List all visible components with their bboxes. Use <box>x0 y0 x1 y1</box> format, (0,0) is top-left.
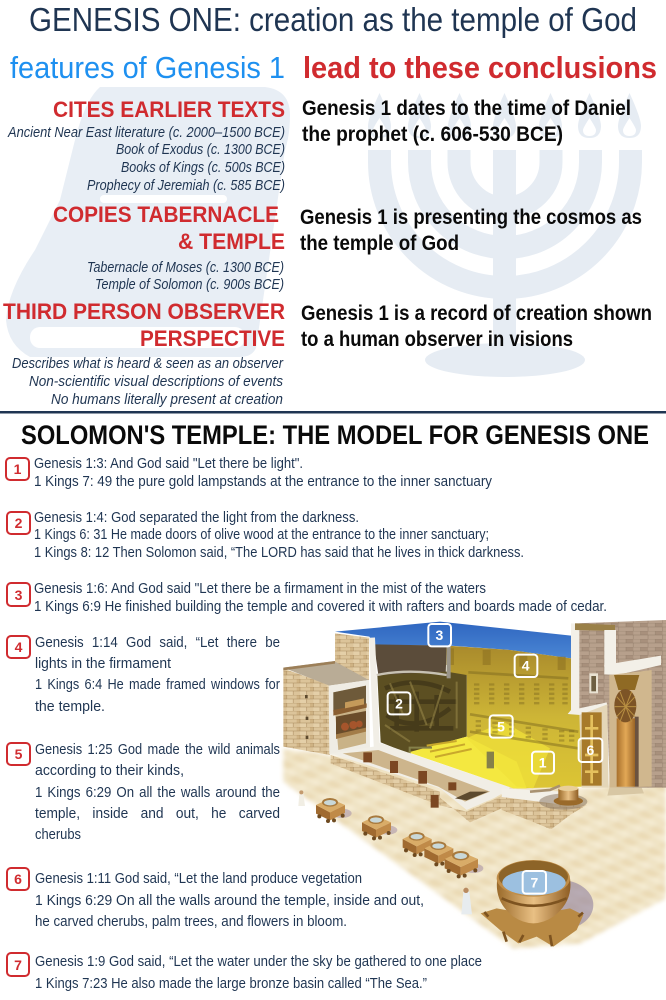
item 3: Genesis 1:6: And God said "Let there be a firmament in the mist of the waters <box>34 581 486 597</box>
item 4: Genesis 1:14 God said, “Let there be <box>35 635 280 651</box>
item 3: 3 <box>15 587 23 603</box>
feature: copies tabernacle and temple: Tabernacle of Moses (c. 1300 BCE) <box>87 259 284 276</box>
map marker 5: 5 <box>497 719 505 735</box>
item 1 <box>6 456 493 490</box>
feature: cites earlier texts: Ancient Near East literature (c. 2000–1500 BCE) <box>7 124 285 141</box>
item 6: 1 Kings 6:29 On all the walls around the temple, inside and out, <box>35 893 424 909</box>
map marker 5 <box>490 715 513 738</box>
right porch building <box>568 620 666 796</box>
conclusion: date of Genesis 1: Genesis 1 dates to the time of Daniel <box>302 97 631 120</box>
wheeled stands <box>316 798 483 878</box>
item 4: lights in the firmament <box>35 656 171 672</box>
white cut section edge <box>372 638 509 790</box>
item 7 <box>7 953 482 992</box>
blue roof <box>335 622 571 658</box>
illustration: cutaway of Solomon's temple <box>283 620 666 948</box>
item 4: 1 Kings 6:4 He made framed windows for <box>35 677 280 693</box>
feature: cites earlier texts: Book of Exodus (c. 1300 BCE) <box>116 141 285 158</box>
map marker 6 <box>579 738 602 762</box>
conclusion: cosmos as temple <box>300 206 642 255</box>
item 7: 1 Kings 7:23 He also made the large bronze basin called “The Sea.” <box>35 976 427 992</box>
item 6 <box>7 868 424 930</box>
feature: copies tabernacle and temple: COPIES TABERNACLE <box>53 202 279 227</box>
low cut stone wall <box>331 746 587 829</box>
feature: third person observer perspective: THIRD PERSON OBSERVER <box>3 299 285 324</box>
item 2 <box>7 510 524 561</box>
item 1: 1 <box>14 461 22 477</box>
watermark: left stone shape <box>6 87 290 357</box>
item 3: 1 Kings 6:9 He finished building the temple and covered it with rafters and boards made of cedar. <box>34 599 607 615</box>
map marker 4: 4 <box>522 658 530 674</box>
conclusion: record of visions: to a human observer in visions <box>301 328 573 351</box>
conclusion: cosmos as temple: the temple of God <box>300 232 459 255</box>
feature: third person observer perspective: Describes what is heard & seen as an observer <box>12 355 284 372</box>
left side chambers wall <box>283 633 380 755</box>
map marker 2 <box>388 692 410 714</box>
item 6: he carved cherubs, palm trees, and flowers in bloom. <box>35 914 347 930</box>
feature: copies tabernacle and temple: & TEMPLE <box>178 229 285 254</box>
item 5: 5 <box>15 746 23 762</box>
item 4 <box>7 635 280 715</box>
feature: cites earlier texts: Prophecy of Jeremiah (c. 585 BCE) <box>87 177 285 194</box>
item 6: 6 <box>14 871 22 887</box>
feature: third person observer perspective: Non-scientific visual descriptions of events <box>29 373 283 390</box>
feature: copies tabernacle and temple: Temple of Solomon (c. 900s BCE) <box>95 276 284 293</box>
item 5 <box>7 742 280 843</box>
human figures <box>298 790 472 914</box>
feature: third person observer perspective: PERSPECTIVE <box>140 326 285 351</box>
conclusion: record of visions <box>301 302 652 351</box>
lampstand base near entrance <box>530 786 587 810</box>
map marker 3 <box>428 624 451 646</box>
map marker 1: 1 <box>539 755 547 771</box>
item 1: Genesis 1:3: And God said "Let there be light". <box>34 456 303 472</box>
item 5: temple, inside and out, he carved <box>35 806 280 822</box>
conclusion: date of Genesis 1: the prophet (c. 606-530 BCE) <box>302 123 563 146</box>
map marker 2: 2 <box>395 695 403 711</box>
feature: copies tabernacle and temple <box>53 202 285 293</box>
feature: third person observer perspective: No humans literally present at creation <box>51 391 283 408</box>
map marker 6: 6 <box>586 742 594 758</box>
item 4: 4 <box>15 639 23 655</box>
conclusion: date of Genesis 1 <box>302 97 631 146</box>
feature: cites earlier texts: CITES EARLIER TEXTS <box>53 97 285 122</box>
item 5: cherubs <box>35 827 81 843</box>
item 3 <box>7 581 607 615</box>
map marker 7 <box>523 871 546 894</box>
item 4: the temple. <box>35 699 105 715</box>
item 1: 1 Kings 7: 49 the pure gold lampstands at the entrance to the inner sanctuary <box>34 474 493 490</box>
feature: cites earlier texts: Books of Kings (c. 500s BCE) <box>121 159 285 176</box>
item 5: according to their kinds, <box>35 763 184 779</box>
feature: third person observer perspective <box>3 299 285 408</box>
item 7: 7 <box>14 957 22 973</box>
item 2: 1 Kings 8: 12 Then Solomon said, “The LORD has said that he lives in thick darkness. <box>34 545 524 561</box>
item 6: Genesis 1:11 God said, “Let the land produce vegetation <box>35 871 362 887</box>
item 7: Genesis 1:9 God said, “Let the water under the sky be gathered to one place <box>35 954 482 970</box>
map marker 1 <box>532 752 554 774</box>
item 5: Genesis 1:25 God made the wild animals <box>35 742 280 758</box>
item 2: 2 <box>15 515 23 531</box>
map marker 3: 3 <box>435 627 443 643</box>
watermark: menorah <box>368 93 641 377</box>
map marker 4 <box>515 655 537 677</box>
item 5: 1 Kings 6:29 On all the walls around the <box>35 785 280 801</box>
item 2: Genesis 1:4: God separated the light from the darkness. <box>34 510 359 526</box>
feature: cites earlier texts <box>7 97 285 194</box>
heading: features of Genesis 1: features of Genesis 1 <box>10 50 285 85</box>
courtyard floor <box>283 748 666 948</box>
item 2: 1 Kings 6: 31 He made doors of olive wood at the entrance to the inner sanctuary; <box>34 527 489 543</box>
interior walls <box>374 644 582 788</box>
bronze basin, The Sea <box>481 860 593 947</box>
map marker 7: 7 <box>530 874 538 890</box>
